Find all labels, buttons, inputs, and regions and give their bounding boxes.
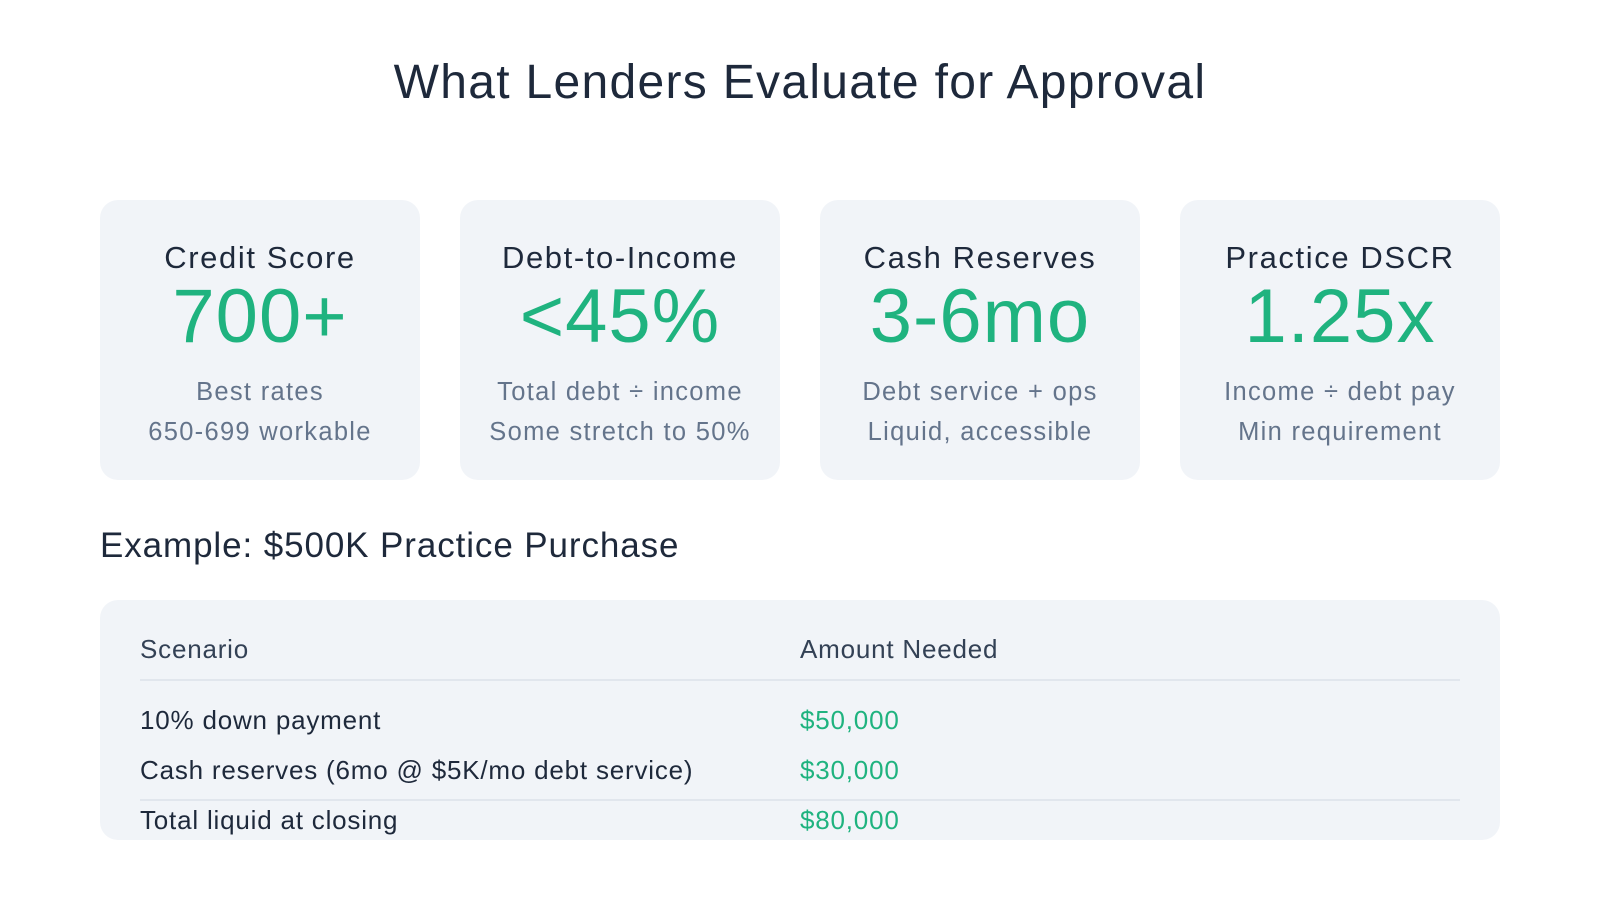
table panel: $80,000 (800, 805, 900, 835)
card: cash reserves: Debt service + ops (862, 378, 1098, 406)
card: debt-to-income: Total debt ÷ income (497, 378, 743, 406)
row: down payment (140, 705, 900, 735)
table panel: Amount Needed (800, 634, 998, 664)
table panel: $50,000 (800, 705, 900, 735)
table panel (100, 600, 1500, 840)
card: practice DSCR: 1.25x (1245, 274, 1435, 359)
row: total (140, 805, 900, 835)
title: What Lenders Evaluate for Approval (394, 56, 1206, 109)
table panel: 10% down payment (140, 705, 381, 735)
table header (140, 634, 998, 664)
table panel: Total liquid at closing (140, 805, 398, 835)
table panel: Scenario (140, 634, 249, 664)
card: credit score: Best rates (196, 378, 324, 406)
card: practice DSCR: Min requirement (1238, 418, 1442, 446)
card: debt-to-income: <45% (520, 274, 720, 359)
card: credit score: 650-699 workable (148, 418, 372, 446)
card: cash reserves: 3-6mo (870, 274, 1090, 359)
card: credit score: Credit Score (164, 240, 356, 275)
card: debt-to-income (460, 200, 780, 480)
card: practice DSCR (1180, 200, 1500, 480)
card: cash reserves (820, 200, 1140, 480)
card: cash reserves: Liquid, accessible (868, 418, 1092, 446)
card: credit score (100, 200, 420, 480)
row: cash reserves (140, 755, 900, 785)
card: practice DSCR: Practice DSCR (1225, 240, 1455, 275)
card: credit score: 700+ (172, 274, 348, 359)
example heading: Example: $500K Practice Purchase (100, 526, 679, 565)
card: cash reserves: Cash Reserves (864, 240, 1096, 275)
card: practice DSCR: Income ÷ debt pay (1224, 378, 1456, 406)
table panel: $30,000 (800, 755, 900, 785)
table panel: Cash reserves (6mo @ $5K/mo debt service) (140, 755, 693, 785)
card: debt-to-income: Some stretch to 50% (489, 418, 751, 446)
card: debt-to-income: Debt-to-Income (502, 240, 738, 275)
